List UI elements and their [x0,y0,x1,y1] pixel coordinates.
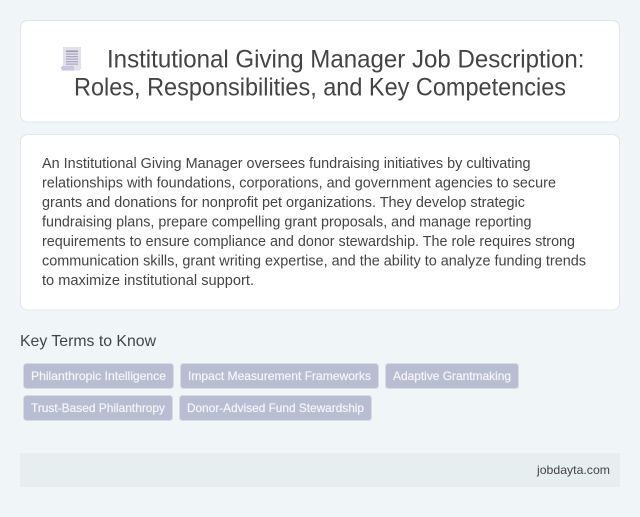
text block: description: relationships with foundations, corporations, and government agencies to secure [42,176,556,192]
chip: Impact Measurement Frameworks: Impact Measurement Frameworks [188,369,371,383]
heading: key terms: Key Terms to Know [20,333,156,350]
chip: Adaptive Grantmaking [386,364,518,388]
title: Institutional Giving Manager Job Description: [107,46,584,74]
title: Roles, Responsibilities, and Key Competencies [74,74,566,102]
chips: key terms [24,364,518,420]
footer: jobdayta.com [536,463,610,477]
panel: description card [20,134,620,310]
text block: description: communication skills, grant writing expertise, and the ability to analyze funding trends [42,254,586,270]
text block: description: fundraising plans, prepare compelling grant proposals, and manage reporting [42,214,532,230]
text block: description: to maximize institutional support. [42,273,254,289]
chip: Philanthropic Intelligence: Philanthropic Intelligence [31,369,166,383]
footer [20,453,620,487]
panel: title card [20,20,620,122]
text block: description: grants and donations for nonprofit pet organizations. They develop strategic [42,195,525,211]
icon: document scroll [61,47,81,71]
chip: Adaptive Grantmaking: Adaptive Grantmaking [393,369,511,383]
text block: description [42,156,586,289]
chip: Donor-Advised Fund Stewardship [180,396,372,420]
text block: description: An Institutional Giving Manager oversees fundraising initiatives by cultivating [42,156,530,172]
chip: Philanthropic Intelligence [24,364,174,388]
chip: Trust-Based Philanthropy [24,396,172,420]
text block: description: requirements to ensure compliance and donor stewardship. The role requires strong [42,234,575,250]
chip: Donor-Advised Fund Stewardship: Donor-Advised Fund Stewardship [187,401,364,415]
chip: Trust-Based Philanthropy: Trust-Based Philanthropy [31,401,165,415]
chip: Impact Measurement Frameworks [180,364,378,388]
title [74,46,584,102]
